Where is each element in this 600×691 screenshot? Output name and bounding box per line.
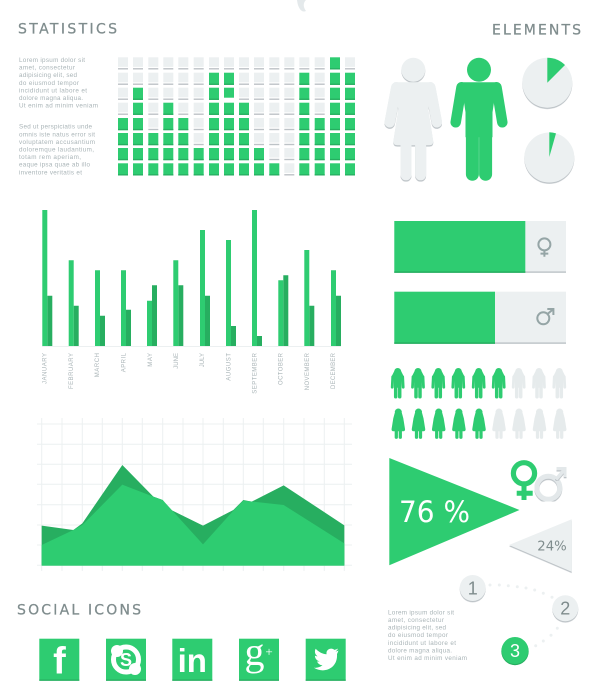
callout: 76 percent triangle xyxy=(389,458,520,565)
icon: female symbol large xyxy=(513,463,535,500)
month labels: SEPTEMBER xyxy=(252,352,258,394)
heading: social icons: SOCIAL ICONS xyxy=(17,602,141,618)
text block: statistics detail: doloremque laudantium, xyxy=(19,147,94,154)
month labels: JANUARY xyxy=(42,353,48,384)
step 1: 1 xyxy=(468,578,478,598)
text block: steps: dolore magna aliqua. xyxy=(388,647,452,654)
callout: 24 percent triangle: 24% xyxy=(537,540,567,554)
text block: statistics intro: dolore magna aliqua. xyxy=(19,95,83,102)
month labels: OCTOBER xyxy=(278,352,284,385)
icon: male symbol xyxy=(547,309,553,315)
text block: statistics intro xyxy=(19,57,98,110)
text block: statistics intro: adipisicing elit, sed xyxy=(19,72,77,79)
icon: skype: S xyxy=(120,650,132,670)
icon: google plus: g xyxy=(244,629,264,674)
text block: statistics intro: Lorem ipsum dolor sit xyxy=(19,57,85,64)
step 3: 3 xyxy=(510,641,520,661)
icon: facebook xyxy=(39,639,79,682)
text block: statistics intro: amet, consectetur xyxy=(19,65,75,72)
icon: skype xyxy=(106,639,146,681)
heading: statistics: STATISTICS xyxy=(18,22,117,38)
month labels: FEBRUARY xyxy=(69,353,75,389)
step 3 xyxy=(501,637,529,665)
bar chart: monthly paired bars xyxy=(42,210,341,394)
icon: female symbol xyxy=(540,251,548,257)
gender bar: male xyxy=(394,292,566,344)
text block: statistics detail: omnis iste natus error sit xyxy=(19,131,95,138)
icon: linkedin: in xyxy=(178,642,207,679)
step 2: 2 xyxy=(560,599,570,619)
icon: twitter xyxy=(306,639,346,681)
month labels: NOVEMBER xyxy=(305,352,311,390)
pie chart: lower xyxy=(524,132,574,182)
text block: statistics intro: do eiusmod tempor xyxy=(19,80,79,87)
text block: steps: adipisicing elit, sed xyxy=(388,625,446,632)
text block: steps: amet, consectetur xyxy=(388,617,444,624)
text block: statistics intro: Ut enim ad minim veniam xyxy=(19,103,98,110)
icon: man figure xyxy=(456,58,502,174)
icon: facebook: f xyxy=(53,640,66,682)
text block: statistics detail: Sed ut perspiciatis unde xyxy=(19,124,92,131)
text block: statistics detail: totam rem aperiam, xyxy=(19,154,81,161)
text block: steps: Ut enim ad minim veniam xyxy=(388,655,467,662)
pictogram row: women xyxy=(392,409,566,437)
icon: google plus xyxy=(239,629,279,681)
step connector dots xyxy=(488,584,559,647)
step 1 xyxy=(460,575,486,601)
icon: male symbol large xyxy=(537,468,566,499)
area chart xyxy=(37,418,352,571)
text block: steps: Lorem ipsum dolor sit xyxy=(388,609,454,616)
text block: statistics detail xyxy=(19,124,95,176)
month labels: APRIL xyxy=(121,352,127,372)
text block: steps: incididunt ut labore et xyxy=(388,640,456,647)
pictogram row: men xyxy=(392,368,565,397)
text block: statistics intro: incididunt ut labore et xyxy=(19,87,87,94)
text block: statistics detail: eaque ipsa quae ab illo xyxy=(19,162,90,169)
text block: statistics detail: inventore veritatis et xyxy=(19,169,82,176)
callout: 76 percent triangle: 76 % xyxy=(399,495,470,529)
month labels xyxy=(42,352,337,394)
text block: steps xyxy=(388,609,467,662)
month labels: JUNE xyxy=(174,353,180,369)
month labels: DECEMBER xyxy=(331,352,337,389)
text block: statistics detail: voluptatem accusantium xyxy=(19,139,95,146)
heading: elements: ELEMENTS xyxy=(492,22,581,38)
waffle bar chart xyxy=(118,57,355,175)
step 2 xyxy=(552,595,578,621)
icon: woman figure xyxy=(390,58,437,175)
text block: steps: do eiusmod tempor xyxy=(388,632,448,639)
month labels: AUGUST xyxy=(226,353,232,381)
month labels: JULY xyxy=(200,353,206,367)
month labels: MARCH xyxy=(95,353,101,377)
top edge fragment xyxy=(297,0,306,12)
gender bar: female xyxy=(394,221,566,273)
callout: 24 percent triangle xyxy=(509,519,572,572)
month labels: MAY xyxy=(148,353,154,367)
icon: linkedin xyxy=(172,639,212,681)
icon: google plus: + xyxy=(265,644,273,659)
pie chart: upper xyxy=(522,58,572,108)
